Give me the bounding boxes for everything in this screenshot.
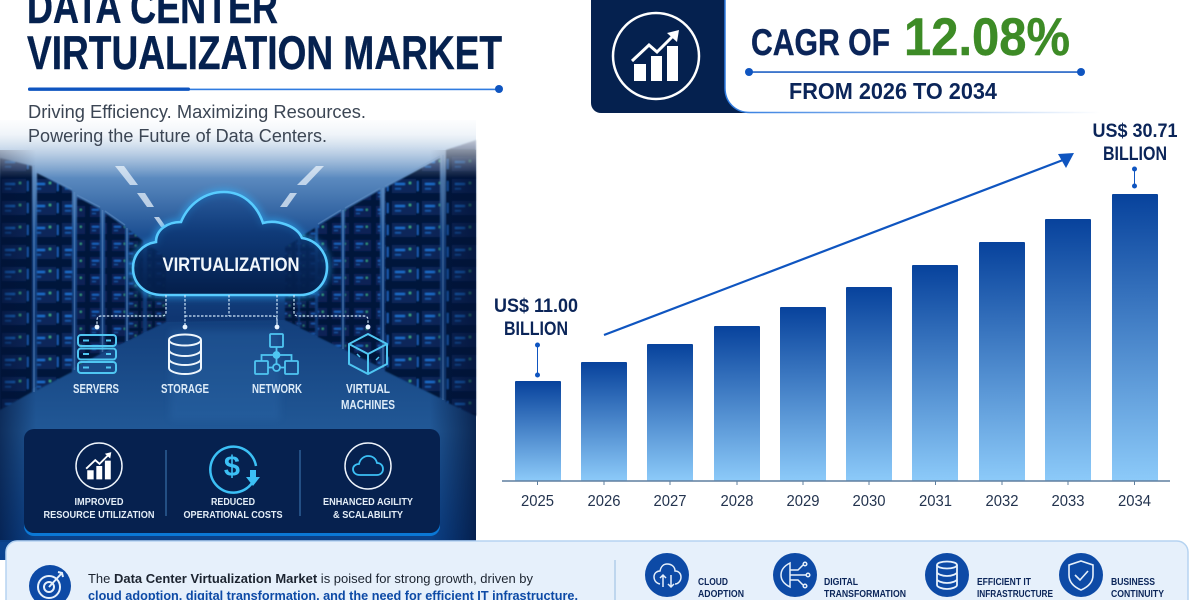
year labels: 2030 [852,493,886,510]
icon: resource utilization [76,443,122,489]
axis [502,480,1170,482]
label: storage: STORAGE [161,382,209,396]
subtitle [28,101,366,146]
title rule [28,85,503,93]
text: improved resource utilization [44,496,154,521]
racks: left row [0,158,166,410]
top fade [0,116,478,178]
year labels: 2029 [786,493,820,510]
icon: growth chart [613,13,699,99]
text: improved resource utilization: RESOURCE UTILIZATION [44,509,154,521]
subtitle: Driving Efficiency. Maximizing Resources. [28,101,366,122]
title: VIRTUALIZATION MARKET [27,26,502,79]
year labels: 2026 [588,493,621,510]
text: enhanced agility: ENHANCED AGILITY [323,496,413,508]
rack frames [34,155,443,400]
label: servers: SERVERS [73,382,119,396]
text: reduced operational costs: OPERATIONAL COSTS [184,509,282,521]
year labels: 2034 [1118,493,1151,510]
year labels: 2033 [1052,493,1085,510]
label: virtual machines: MACHINES [341,398,395,412]
text: CAGR value [751,8,1070,67]
driver: business continuity: CONTINUITY [1111,588,1164,600]
floor [0,320,476,542]
callout: 2025 value: BILLION [504,319,568,340]
text: improved resource utilization: IMPROVED [74,496,124,508]
driver: digital transformation: DIGITAL [824,576,858,588]
text: summary: The Data Center Virtualization Market is poised for strong growth, driven by [88,571,533,586]
cloud: virtualization [133,192,327,295]
driver: business continuity: BUSINESS [1111,576,1155,588]
label: virtual machines [341,382,395,412]
text: reduced operational costs: REDUCED [211,496,255,508]
text: summary [88,571,578,600]
cloud: virtualization: VIRTUALIZATION [162,254,300,276]
driver: efficient IT infrastructure [925,553,1053,600]
panel: data center hero image [0,116,478,560]
edge darkening [0,150,36,540]
title [27,0,502,79]
text: reduced operational costs [184,496,282,521]
text: period: FROM 2026 TO 2034 [789,78,997,104]
bars [515,194,1158,481]
icon: reduced costs: $ [224,451,240,483]
year labels: 2027 [654,493,687,510]
driver: efficient IT infrastructure: INFRASTRUCTURE [977,588,1053,600]
text: enhanced agility [323,496,413,521]
panel: summary strip [6,541,1188,600]
year labels: 2028 [720,493,754,510]
icon: target [29,565,71,600]
year labels [521,493,1151,510]
driver: digital transformation [773,553,906,600]
bar chart [502,194,1170,510]
panel: CAGR [591,0,1100,113]
icon: storage [169,334,201,374]
callout: 2025 value [494,296,578,378]
year labels: 2025 [521,493,554,510]
driver: business continuity [1059,553,1164,600]
racks: right row [285,140,476,416]
text: CAGR value: CAGR OF [751,22,890,63]
panel: benefits [24,429,440,536]
callout: 2034 value: US$ 30.71 [1092,121,1178,142]
icon: servers [78,335,116,373]
subtitle: Powering the Future of Data Centers. [28,125,327,146]
year labels: 2032 [986,493,1019,510]
ceiling lights [115,166,324,227]
driver: digital transformation: TRANSFORMATION [824,588,906,600]
rule [745,68,1085,76]
icon: agility cloud [345,443,391,489]
text: enhanced agility: & SCALABILITY [333,509,403,521]
callout: 2034 value: BILLION [1103,144,1167,165]
icon: network [255,334,298,374]
year labels: 2031 [919,493,952,510]
driver: cloud adoption: ADOPTION [698,588,744,600]
arrow: growth trend [604,153,1074,335]
icon: virtual machine cube [349,334,387,374]
callout: 2025 value: US$ 11.00 [494,296,578,317]
driver: cloud adoption: CLOUD [698,576,728,588]
driver: cloud adoption [645,553,744,600]
connectors [97,295,368,327]
icon: reduced costs [210,447,260,493]
callout: 2034 value [1092,121,1178,188]
text: CAGR value: 12.08% [904,8,1070,67]
label: network: NETWORK [252,382,302,396]
driver: efficient IT infrastructure: EFFICIENT IT [977,576,1031,588]
label: virtual machines: VIRTUAL [346,382,390,396]
